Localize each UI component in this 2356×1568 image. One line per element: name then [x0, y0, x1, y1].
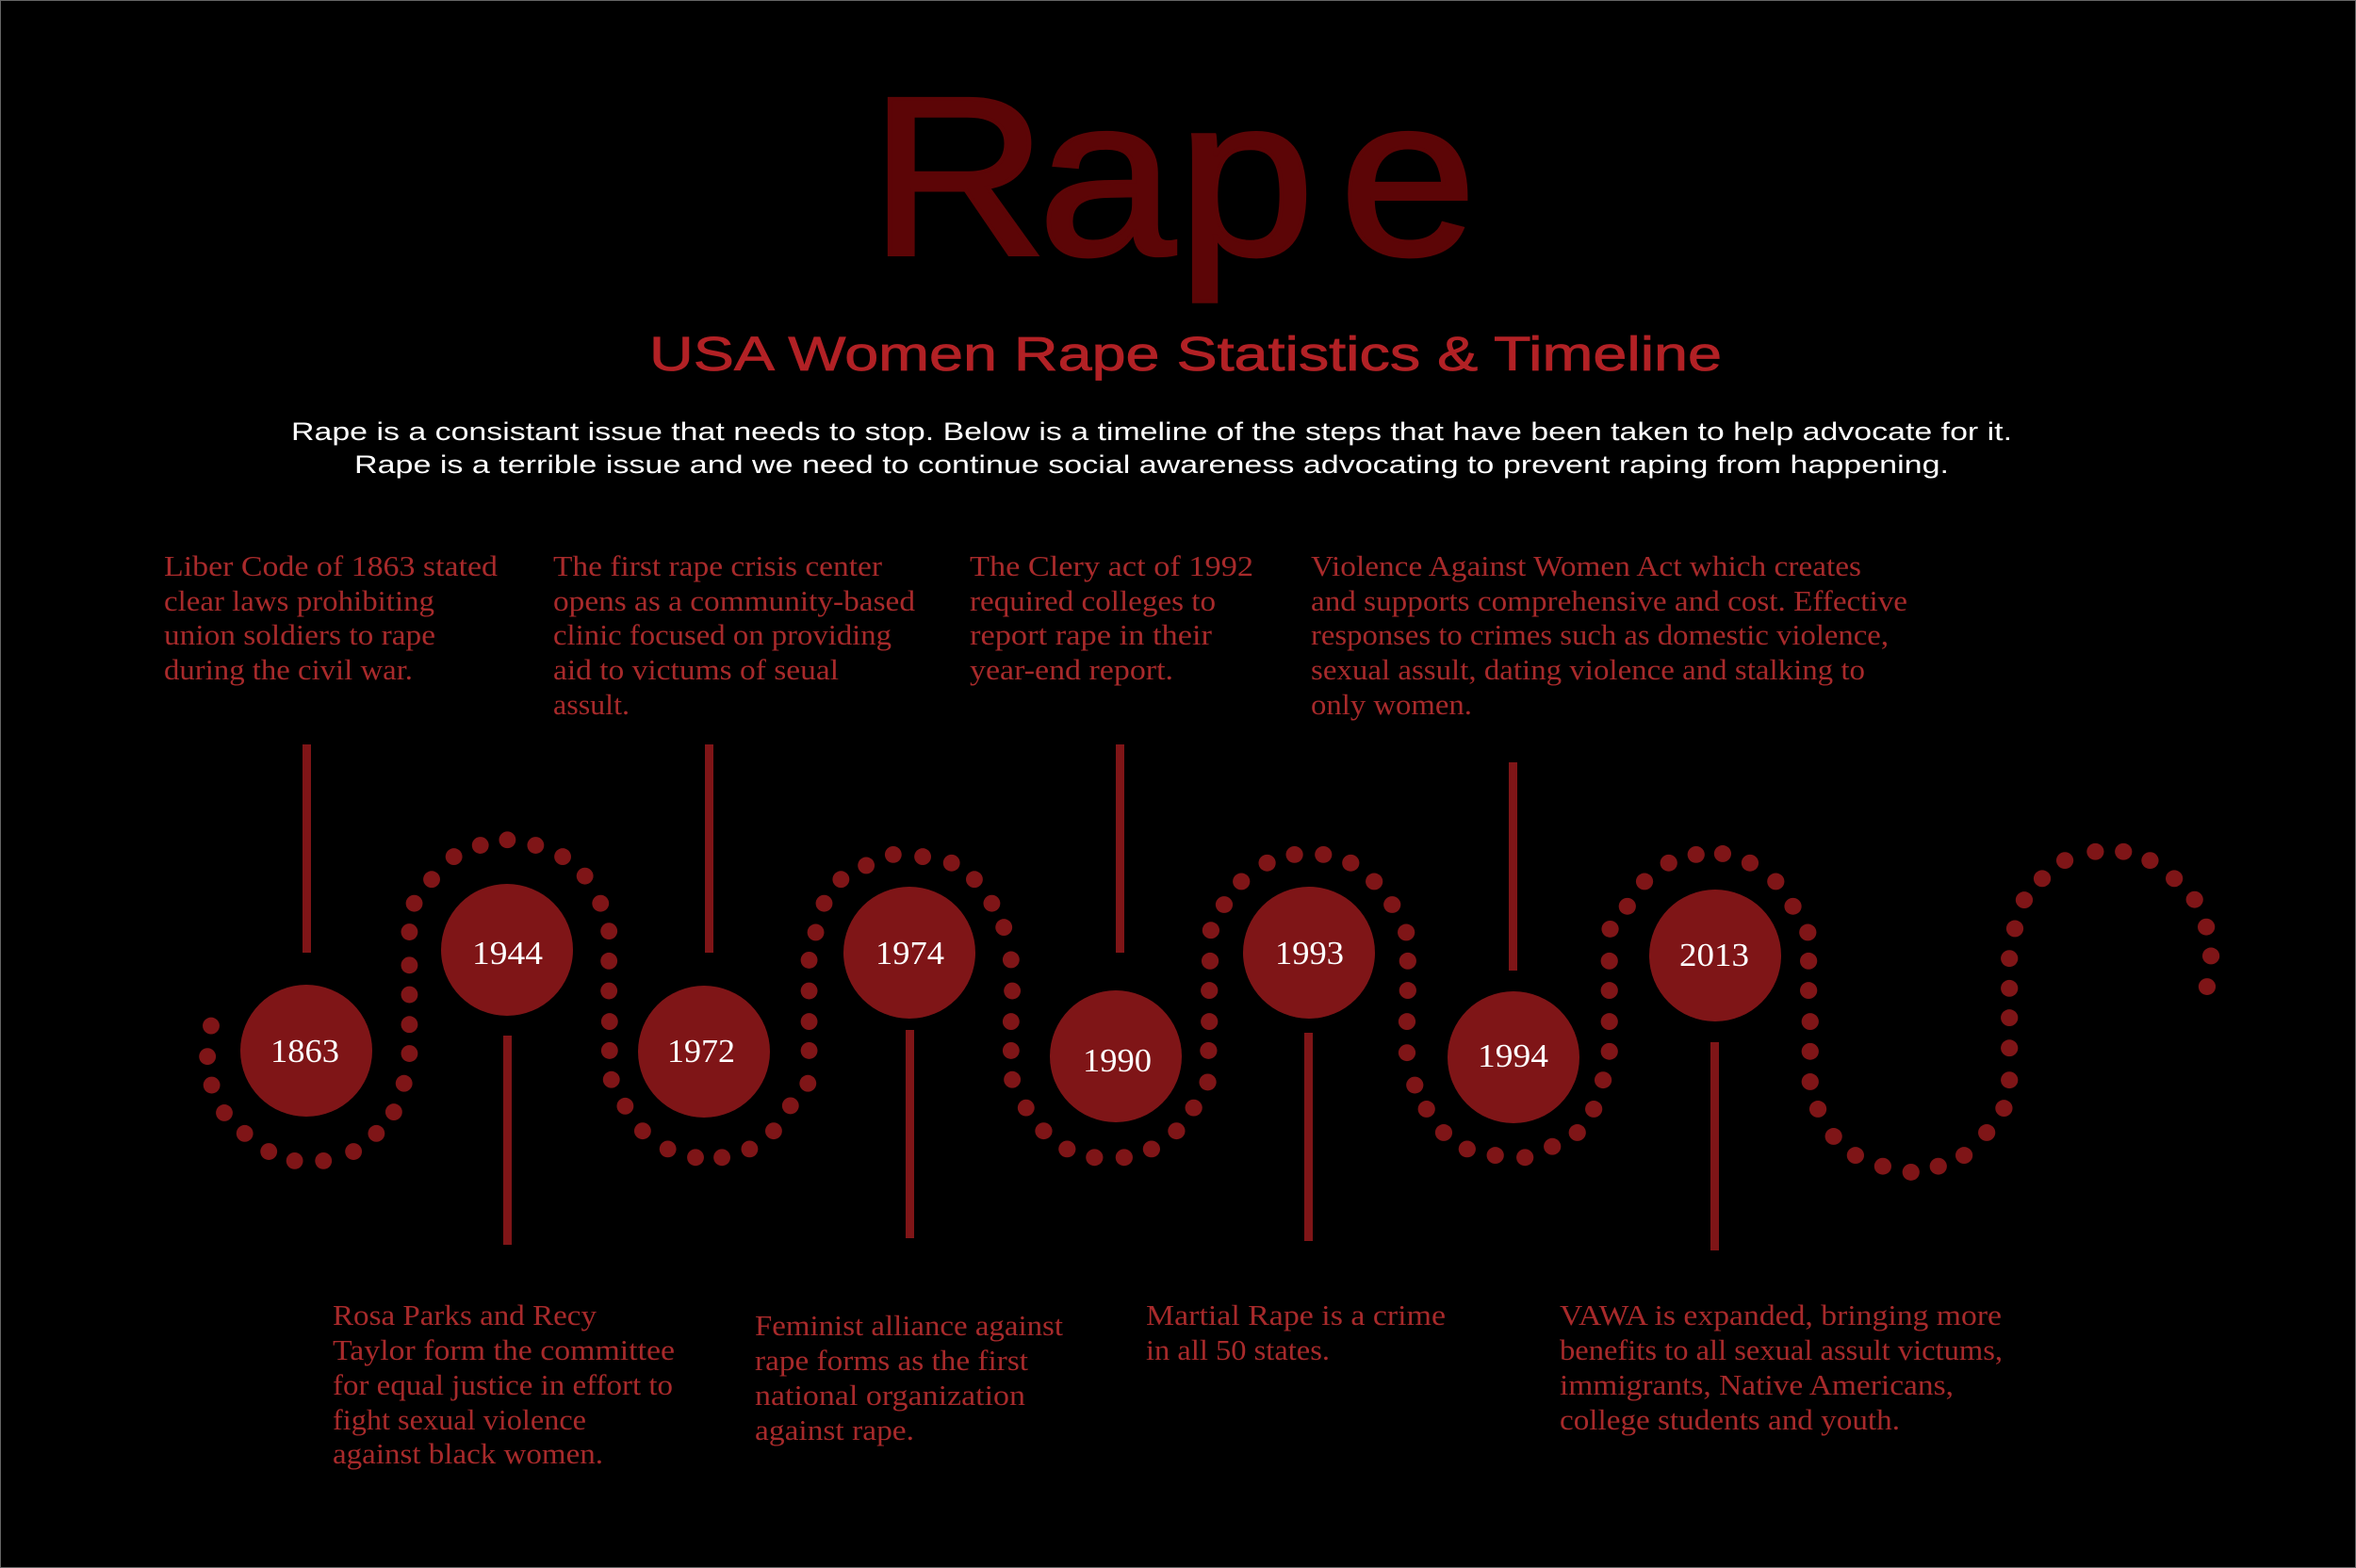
text: 1944: against black women. — [333, 1437, 603, 1470]
node: 1993: 1993 — [1275, 935, 1344, 972]
text: 1974 — [755, 1309, 1063, 1446]
text: 2013: VAWA is expanded, bringing more — [1560, 1298, 2002, 1331]
text: 1990 — [970, 549, 1253, 686]
milestone 1972 — [553, 549, 916, 1118]
node: 1972 — [638, 986, 770, 1118]
node: 1972: 1972 — [667, 1033, 735, 1070]
node: 1944: 1944 — [472, 935, 543, 972]
text: 2013 — [1560, 1298, 2003, 1436]
node: 1994: 1994 — [1478, 1037, 1548, 1074]
connector: 1990 — [1116, 744, 1124, 953]
text: 1944: for equal justice in effort to — [333, 1368, 673, 1401]
text: 1863: clear laws prohibiting — [164, 584, 434, 617]
text: 1990: year-end report. — [970, 653, 1173, 686]
text: 2013: immigrants, Native Americans, — [1560, 1368, 1954, 1401]
milestone 1863 — [164, 549, 499, 1117]
text: 2013: benefits to all sexual assult victums, — [1560, 1333, 2003, 1366]
connector: 1994 — [1509, 762, 1517, 971]
node: 1974 — [843, 887, 975, 1019]
text: 1994: only women. — [1311, 688, 1472, 721]
text: 1944: fight sexual violence — [333, 1403, 586, 1436]
text: 1990: The Clery act of 1992 — [970, 549, 1253, 582]
text: 1972 — [553, 549, 916, 721]
node: 1974: 1974 — [875, 935, 944, 972]
connector: 1974 — [906, 1030, 914, 1238]
milestone 2013 — [1560, 890, 2003, 1436]
connector: 1863 — [303, 744, 311, 953]
milestone 1974 — [755, 887, 1063, 1446]
text: 1994: sexual assult, dating violence and stalking to — [1311, 653, 1865, 686]
node: 2013 — [1649, 890, 1781, 1021]
connector: 2013 — [1710, 1042, 1719, 1250]
text: 1972: The first rape crisis center — [553, 549, 883, 582]
text: 1972: assult. — [553, 688, 630, 721]
node: 1863: 1863 — [270, 1033, 339, 1070]
text: 2013: college students and youth. — [1560, 1403, 1900, 1436]
text: 1994: Violence Against Women Act which creates — [1311, 549, 1861, 582]
text: 1990: required colleges to — [970, 584, 1216, 617]
text: 1944: Taylor form the committee — [333, 1333, 675, 1366]
intro text: Rape is a terrible issue and we need to continue social awareness advocating to prevent raping from happening. — [354, 450, 1949, 479]
milestone 1993 — [1146, 887, 1446, 1366]
text: 1863: during the civil war. — [164, 653, 413, 686]
text: 1974: national organization — [755, 1379, 1026, 1412]
text: 1863: Liber Code of 1863 stated — [164, 549, 499, 582]
node: 1990 — [1050, 990, 1182, 1122]
text: 1990: report rape in their — [970, 618, 1213, 651]
text: 1994: and supports comprehensive and cost. Effective — [1311, 584, 1907, 617]
text: 1994: responses to crimes such as domestic violence, — [1311, 618, 1889, 651]
connector: 1944 — [503, 1036, 512, 1245]
node: 1990: 1990 — [1083, 1042, 1152, 1079]
text: 1972: clinic focused on providing — [553, 618, 892, 651]
node: 1863 — [240, 985, 372, 1117]
title: Rape — [870, 51, 1477, 303]
text: 1993 — [1146, 1298, 1446, 1366]
text: 1972: aid to victums of seual — [553, 653, 839, 686]
milestone 1944 — [333, 884, 675, 1470]
text: 1974: Feminist alliance against — [755, 1309, 1063, 1342]
dotted wave path — [199, 831, 2219, 1181]
text: 1974: rape forms as the first — [755, 1344, 1028, 1377]
text: 1944: Rosa Parks and Recy — [333, 1298, 597, 1331]
node: 2013: 2013 — [1679, 937, 1749, 973]
text: 1972: opens as a community-based — [553, 584, 916, 617]
node: 1993 — [1243, 887, 1375, 1019]
intro text — [291, 417, 2012, 479]
intro text: Rape is a consistant issue that needs to stop. Below is a timeline of the steps that have been taken to help advocate for it. — [291, 417, 2012, 446]
connector: 1972 — [705, 744, 713, 953]
subtitle: USA Women Rape Statistics & Timeline — [649, 327, 1722, 381]
text: 1863: union soldiers to rape — [164, 618, 435, 651]
text: 1863 — [164, 549, 499, 686]
connector: 1993 — [1304, 1033, 1313, 1241]
node: 1994 — [1448, 991, 1579, 1123]
text: 1993: in all 50 states. — [1146, 1333, 1330, 1366]
text: 1944 — [333, 1298, 675, 1470]
text: 1994 — [1311, 549, 1907, 721]
text: 1993: Martial Rape is a crime — [1146, 1298, 1446, 1331]
milestone 1990 — [970, 549, 1253, 1122]
milestone 1994 — [1311, 549, 1907, 1123]
node: 1944 — [441, 884, 573, 1016]
text: 1974: against rape. — [755, 1413, 914, 1446]
